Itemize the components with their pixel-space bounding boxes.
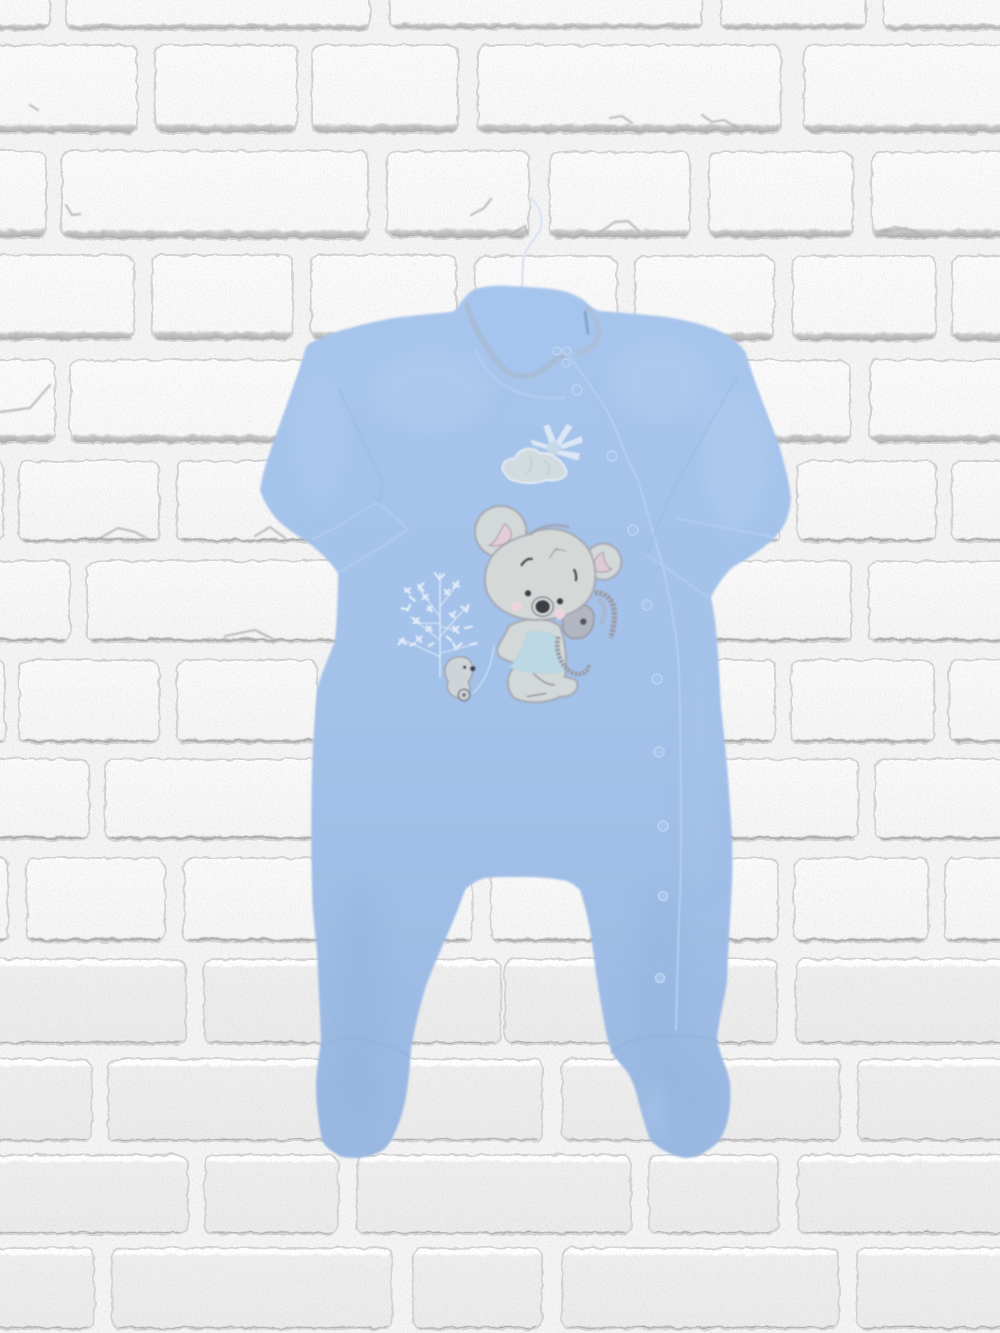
bear body: [497, 619, 577, 702]
little bear: [445, 657, 475, 701]
baby sleepsuit: [260, 286, 791, 1158]
collar and seams: [312, 305, 772, 1056]
plaster chips: [0, 105, 922, 640]
suit silhouette: [260, 286, 791, 1158]
bunny ears: [595, 593, 615, 638]
collar inside: [467, 288, 590, 375]
sun and cloud: [502, 424, 583, 483]
fabric shading: [294, 288, 769, 1145]
balloon string: [473, 645, 494, 693]
bunny toy: [562, 605, 594, 638]
snap buttons: [553, 347, 668, 982]
placket line: [570, 357, 681, 1030]
hanger hook: [522, 198, 542, 288]
face: [522, 559, 532, 565]
foot seams: [322, 1038, 408, 1056]
dress: [510, 632, 565, 673]
head: [485, 529, 595, 620]
big bear: [475, 506, 621, 702]
sleeve seams: [340, 390, 383, 503]
tree: [399, 573, 477, 677]
ears: [475, 506, 526, 557]
bear applique artwork: [399, 424, 621, 702]
